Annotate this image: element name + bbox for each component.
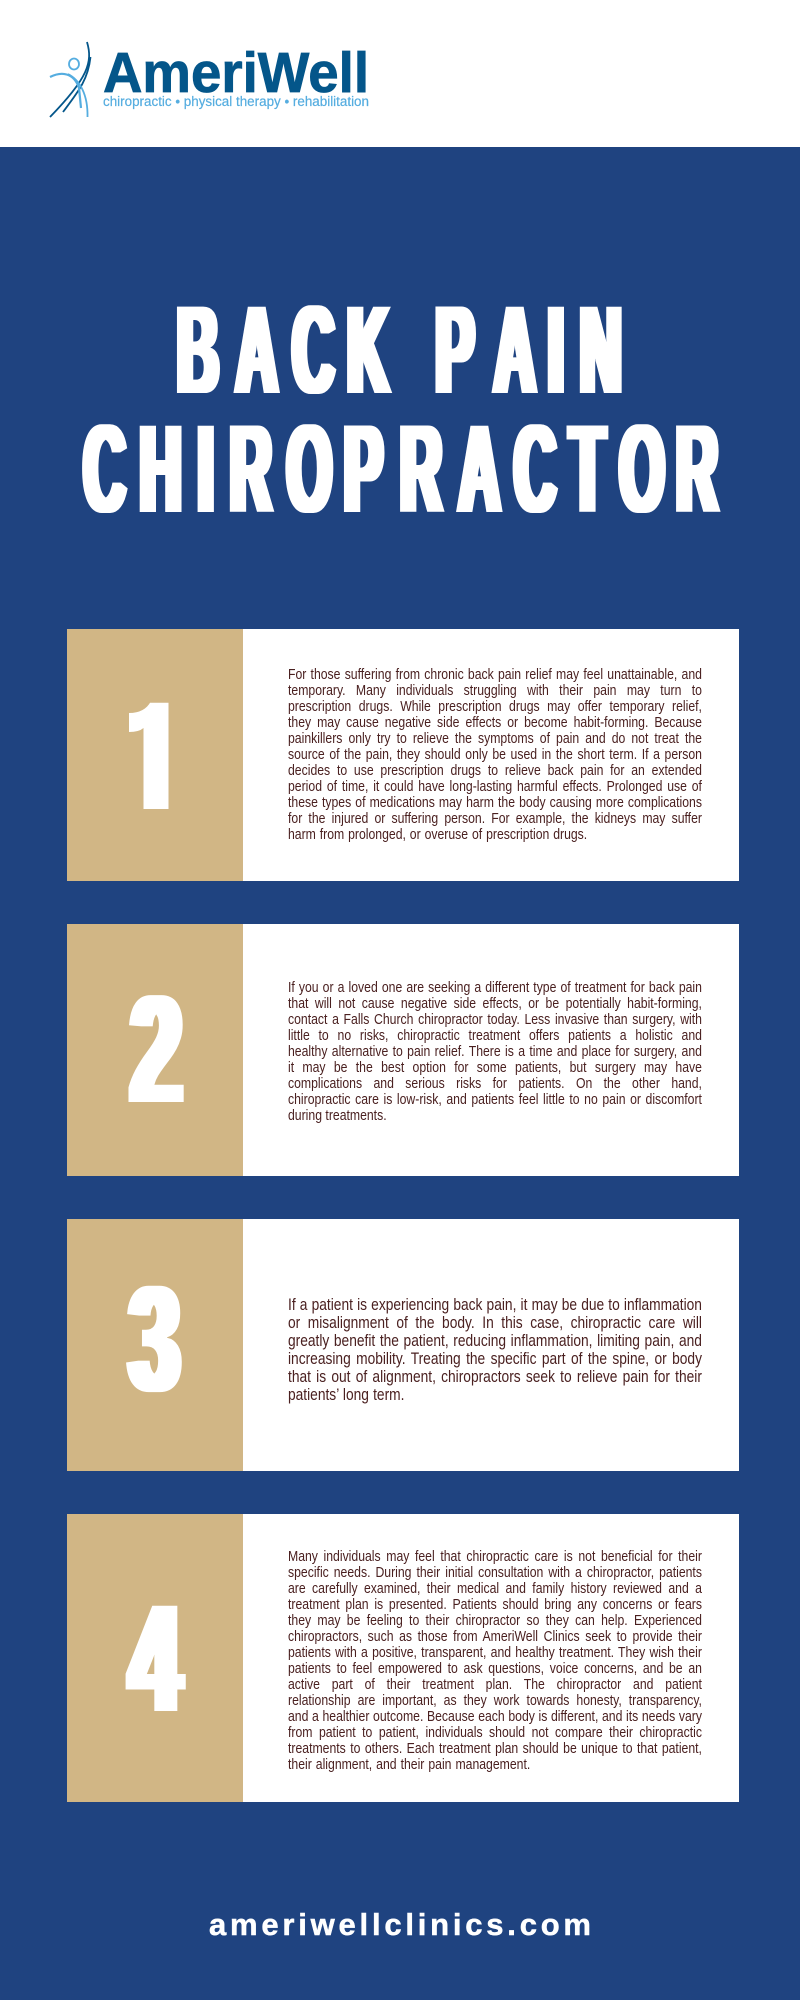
text block 4: Many individuals may feel that chiropractic care is not beneficial for their (288, 1549, 701, 1565)
text block 4: they may be feeling to their chiropractor so they can help. Experienced (288, 1613, 701, 1629)
text block 3 (288, 1296, 702, 1404)
text block 1: these types of medications may harm the body causing more complications (288, 795, 701, 811)
text block 3: If a patient is experiencing back pain, it may be due to inflammation (288, 1296, 701, 1314)
footer website: ameriwellclinics.com (209, 1907, 591, 1942)
text block 4: specific needs. During their initial consultation with a chiropractor, patients (288, 1565, 701, 1581)
text block 2: during treatments. (288, 1108, 386, 1124)
text block 2: chiropractic care is low-risk, and patients feel little to no pain or discomfort (288, 1092, 701, 1108)
text block 4 (288, 1549, 702, 1773)
text block 1: for the injured or suffering person. For example, the kidneys may suffer (288, 811, 701, 827)
text block 3: that is out of alignment, chiropractors seek to relieve pain for their (288, 1368, 701, 1386)
panel: step 2 (67, 924, 739, 1176)
number block 4: 4 (130, 1573, 181, 1744)
panel: step 4 (67, 1514, 739, 1802)
number block 4 (67, 1514, 243, 1802)
text block 2 (288, 980, 702, 1124)
number block 2 (67, 924, 243, 1176)
text block 2: little to no risks, chiropractic treatment offers patients a holistic and (288, 1028, 701, 1044)
text block 2: If you or a loved one are seeking a different type of treatment for back pain (288, 980, 701, 996)
text block 1: harm from prolonged, or overuse of prescription drugs. (288, 827, 587, 843)
text block 1: painkillers only try to relieve the symptoms of pain and do not treat the (288, 731, 701, 747)
number block 1 (67, 629, 243, 881)
number block 3 (67, 1219, 243, 1471)
text block 2: contact a Falls Church chiropractor today. Less invasive than surgery, with (288, 1012, 701, 1028)
text block 4: from patient to patient, individuals should not compare their chiropractic (288, 1725, 701, 1741)
text block 4: chiropractors, such as those from AmeriWell Clinics seek to provide their (288, 1629, 701, 1645)
text block 4: treatments to others. Each treatment plan should be unique to that patient, (288, 1741, 701, 1757)
number block 3: 3 (130, 1256, 180, 1423)
logo wordmark and tagline: chiropractic • physical therapy • rehabilitation (103, 94, 369, 109)
panel: step 3 (67, 1219, 739, 1471)
title (0, 280, 721, 530)
text block 3: or misalignment of the body. In this case, chiropractic care will (288, 1314, 701, 1332)
text block 4: and a healthier outcome. Because each body is different, and its needs vary (288, 1709, 701, 1725)
text block 2: that will not cause negative side effects, or be potentially habit-forming, (288, 996, 701, 1012)
text block 1: decides to use prescription drugs to relieve back pain for an extended (288, 763, 701, 779)
text block 1: For those suffering from chronic back pain relief may feel unattainable, and (288, 667, 701, 683)
number block 1: 1 (112, 671, 197, 842)
text block 1: prescription drugs. While prescription drugs may offer temporary relief, (288, 699, 701, 715)
text block 4: are carefully examined, their medical and family history reviewed and a (288, 1581, 701, 1597)
text block 1 (288, 667, 702, 843)
text block 2: it may be the best option for some patients, but surgery may have (288, 1060, 701, 1076)
text block 4: patients with a positive, transparent, and healthy treatment. They wish their (288, 1645, 701, 1661)
icon: AmeriWell figure logo (49, 42, 92, 118)
text block 1: they may cause negative side effects or become habit-forming. Because (288, 715, 701, 731)
text block 4: patients to feel empowered to ask questions, voice concerns, and be an (288, 1661, 701, 1677)
text block 2: healthy alternative to pain relief. There is a time and place for surgery, and (288, 1044, 701, 1060)
panel: step 1 (67, 629, 739, 881)
text block 4: their alignment, and their pain management. (288, 1757, 530, 1773)
text block 1: period of time, it could have long-lasting harmful effects. Prolonged use of (288, 779, 701, 795)
text block 1: temporary. Many individuals struggling with their pain may turn to (288, 683, 701, 699)
text block 4: relationship are important, as they work towards honesty, transparency, (288, 1693, 701, 1709)
text block 3: increasing mobility. Treating the specific part of the spine, or body (288, 1350, 701, 1368)
text block 2: complications and serious risks for patients. On the other hand, (288, 1076, 701, 1092)
text block 4: active part of their treatment plan. The chiropractor and patient (288, 1677, 701, 1693)
text block 3: patients’ long term. (288, 1386, 404, 1404)
text block 4: treatment plan is presented. Patients should bring any concerns or fears (288, 1597, 701, 1613)
number block 2: 2 (131, 964, 182, 1135)
header band with logo (0, 0, 800, 147)
text block 1: source of the pain, they should only be used in the short term. If a person (288, 747, 701, 763)
text block 3: greatly benefit the patient, reducing inflammation, limiting pain, and (288, 1332, 701, 1350)
